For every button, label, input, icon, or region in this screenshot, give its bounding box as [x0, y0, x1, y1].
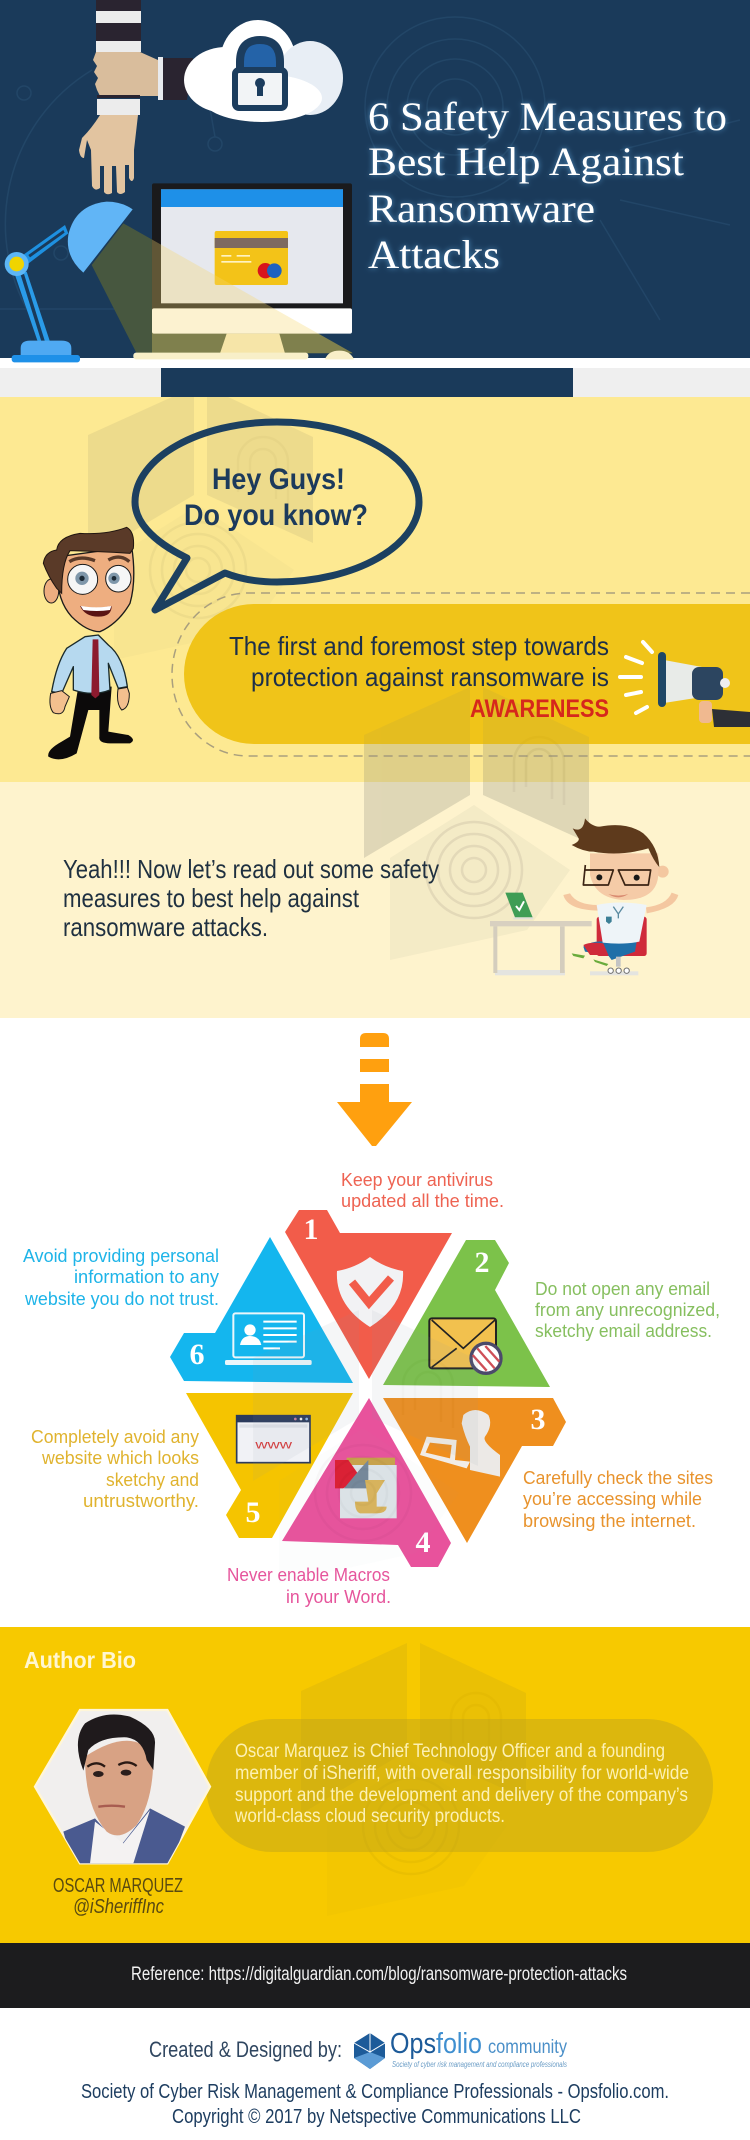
bio pill: support and the development and delivery of the company’s	[235, 1785, 688, 1806]
bio pill: world-class cloud security products.	[234, 1806, 505, 1827]
icon: desk lamp and computer	[5, 183, 354, 362]
text block: safety measures intro: ransomware attacks.	[63, 912, 268, 942]
text block: step 6: Avoid providing personal	[23, 1245, 219, 1266]
callout: awareness text: protection against ransomware is	[251, 662, 609, 692]
chart: six-segment hexagon	[170, 1210, 566, 1567]
segment 1	[285, 1210, 452, 1379]
segment 2: 2	[474, 1246, 490, 1279]
text block: step 2	[535, 1278, 720, 1341]
segment 1: 1	[304, 1213, 318, 1246]
text block: step 4: in your Word.	[286, 1586, 391, 1607]
icon: cloud with padlock	[184, 20, 343, 122]
panel: read-out section background	[0, 782, 750, 1018]
text block: step 5: sketchy and	[106, 1469, 199, 1490]
segment 5: www	[254, 1437, 292, 1451]
text block: step 5: Completely avoid any	[31, 1426, 200, 1447]
logo wordmark	[390, 2028, 567, 2069]
title: Ransomware	[368, 186, 595, 231]
panel: awareness pill	[172, 593, 750, 756]
text block: safety measures intro: measures to best help against	[63, 883, 360, 913]
text block: step 6: information to any	[74, 1266, 220, 1287]
segment 4: 4	[416, 1526, 430, 1559]
callout: awareness text	[229, 631, 609, 723]
segment 4	[282, 1398, 451, 1567]
text block: step 5	[31, 1426, 200, 1511]
title: Best Help Against	[368, 139, 684, 184]
author portrait	[35, 1710, 210, 1867]
text block: step 6	[23, 1245, 220, 1309]
title: 6 Safety Measures to	[368, 94, 727, 139]
header panel	[0, 0, 750, 397]
icon: boy at desk	[490, 818, 678, 975]
callout: speech bubble: Hey Guys!	[212, 463, 345, 496]
bio pill: member of iSheriff, with overall responsibility for world-wide	[235, 1763, 689, 1784]
bio pill: Oscar Marquez is Chief Technology Officer and a founding	[235, 1741, 665, 1762]
footer copyright text: Copyright © 2017 by Netspective Communications LLC	[172, 2105, 581, 2128]
segment 2	[383, 1240, 550, 1387]
segment 3: 3	[530, 1403, 546, 1436]
title	[368, 94, 727, 277]
watermark logo over pill	[364, 687, 589, 960]
callout: speech bubble	[135, 422, 419, 610]
watermark logo in awareness section	[88, 387, 313, 660]
panel: reference bar: Reference: https://digitalguardian.com/blog/ransomware-protection-attacks	[131, 1964, 627, 1985]
text block: step 5: untrustworthy.	[83, 1490, 199, 1511]
text block: step 6: website you do not trust.	[24, 1288, 219, 1309]
text block: step 2: sketchy email address.	[535, 1320, 712, 1341]
callout: speech bubble: Do you know?	[184, 499, 368, 532]
segment 3	[383, 1398, 566, 1543]
text block: step 2: Do not open any email	[535, 1278, 710, 1299]
panel: awareness section background	[0, 397, 750, 782]
panel: author bio	[0, 1627, 750, 1943]
text block: step 2: from any unrecognized,	[535, 1299, 720, 1320]
footer credit	[149, 2028, 567, 2069]
text block: step 1: Keep your antivirus	[341, 1169, 493, 1190]
panel: reference bar	[0, 1943, 750, 2008]
icon: down arrow	[337, 1033, 412, 1146]
text block: safety measures intro	[63, 854, 439, 942]
text block: step 1: updated all the time.	[341, 1190, 504, 1211]
text block: step 3: you’re accessing while	[523, 1488, 702, 1509]
text block: step 3	[523, 1467, 713, 1531]
segment 5	[186, 1393, 353, 1538]
heading: author bio: Author Bio	[24, 1647, 136, 1673]
text block: safety measures intro: Yeah!!! Now let’s read out some safety	[63, 854, 439, 884]
text block: step 1	[341, 1169, 504, 1211]
text block: step 5: website which looks	[41, 1447, 199, 1468]
segment 5: 5	[246, 1496, 260, 1529]
logo wordmark: Opsfolio	[390, 2028, 482, 2060]
title: Attacks	[368, 232, 500, 277]
icon: megaphone	[620, 642, 750, 727]
author name: OSCAR MARQUEZ	[53, 1875, 183, 1897]
text block: step 4: Never enable Macros	[227, 1564, 390, 1585]
footer copyright text	[81, 2080, 669, 2128]
text block: step 3: browsing the internet.	[523, 1510, 696, 1531]
icon: striped sleeve and hands	[79, 0, 193, 194]
text block: step 4	[227, 1564, 391, 1607]
logo wordmark: community	[488, 2037, 567, 2058]
footer credit: Created & Designed by:	[149, 2037, 342, 2062]
callout: awareness text: The first and foremost step towards	[229, 631, 609, 661]
icon: opsfolio logo	[354, 2033, 385, 2069]
logo wordmark: Society of cyber risk management and compliance professionals	[392, 2060, 567, 2069]
bio pill	[206, 1719, 713, 1852]
watermark logo over hexagon	[253, 1310, 478, 1583]
author name: @iSheriffInc	[73, 1896, 164, 1918]
icon: cartoon man	[43, 527, 134, 759]
segment 6: 6	[190, 1338, 204, 1371]
segment 6	[170, 1237, 353, 1383]
watermark logo across sections	[364, 687, 589, 960]
text block: step 3: Carefully check the sites	[523, 1467, 713, 1488]
callout: awareness text: AWARENESS	[470, 695, 609, 723]
author name	[53, 1875, 183, 1918]
